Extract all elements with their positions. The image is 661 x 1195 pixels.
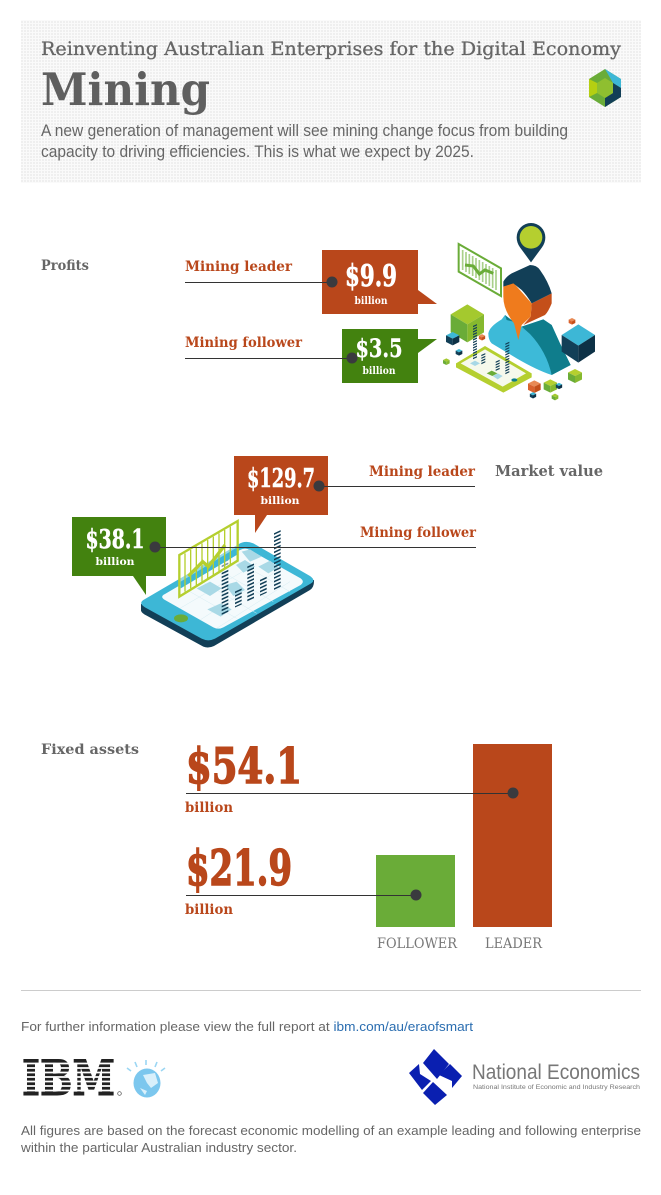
callout: leader market value $129.7 billion: billion [260,496,300,507]
callout: follower profit $3.5 billion [342,329,437,383]
icon: hexagonal gem [589,69,621,107]
disclaimer: within the particular Australian industry sector. [20,1140,297,1155]
logo: National Economics [409,1049,640,1105]
disclaimer: All figures are based on the forecast economic modelling of an example leading and following enterprise [21,1123,641,1138]
follower line [150,542,476,552]
logo: National Economics: National Economics [472,1061,640,1084]
leader line [185,276,338,288]
callout: follower profit $3.5 billion: $3.5 [356,334,402,363]
intro text: capacity to driving efficiencies. This is what we expect by 2025. [41,143,474,161]
bar chart: fixed assets [376,744,552,952]
callout: leader profit $9.9 billion [322,250,437,314]
axis labels: FOLLOWER [377,936,458,952]
value: $54.1 billion [185,737,518,816]
callout: leader profit $9.9 billion: billion [354,296,388,307]
cube: dark blue [562,324,595,363]
panel: header [21,20,641,183]
bar stacks [225,532,277,613]
floating chart [459,244,501,296]
axis labels: LEADER [485,936,543,952]
section label: fixed assets: Fixed assets [41,742,139,758]
value: $21.9 billion: billion [185,902,233,918]
section label: profits: Profits [41,258,89,274]
tablet body [141,542,314,648]
illustration: person with cubes and tablet [443,223,595,400]
profits: mining leader label: Mining leader [185,259,293,275]
market value: mining leader label: Mining leader [369,464,476,480]
icon: smarter planet globe [127,1060,165,1098]
value: $54.1 billion: $54.1 [186,737,302,795]
icon: location pin [517,223,545,262]
value: $54.1 billion: billion [185,800,233,816]
follower line [185,352,358,364]
callout: leader profit $9.9 billion: $9.9 [345,259,397,294]
floating chart [179,521,238,597]
further information text: For further information please view the full report at ibm.com/au/eraofsmart [21,1019,473,1034]
person head [503,265,552,340]
bar: follower [376,855,455,927]
axis labels [377,936,543,952]
callout: leader market value $129.7 billion [234,456,328,533]
screen tiles [197,549,278,617]
value: $21.9 billion [185,839,422,918]
cube: green [451,304,484,342]
callout: follower market value $38.1 billion [72,517,166,595]
logo: National Economics: National Institute of Economic and Industry Research [473,1084,640,1091]
small cubes [443,318,582,400]
leader line [314,480,475,492]
logo: IBM: IBM [22,1049,115,1107]
market value: mining follower label: Mining follower [360,525,477,541]
intro text [41,122,568,161]
callout: follower market value $38.1 billion: $38.1 [86,525,144,555]
value: $21.9 billion: $21.9 [186,839,292,897]
header subtitle: Reinventing Australian Enterprises for the Digital Economy [41,38,621,60]
intro text: A new generation of management will see mining change focus from building [41,122,568,140]
section label: market value: Market value [495,462,603,480]
title: Mining [41,63,210,116]
person body [488,315,571,375]
callout: leader market value $129.7 billion: $129.7 [247,464,315,494]
callout: follower profit $3.5 billion: billion [362,366,396,377]
tablet [456,325,532,393]
disclaimer [20,1123,641,1155]
callout: follower market value $38.1 billion: billion [96,557,135,568]
bar: leader [473,744,552,927]
illustration: tablet with chart [141,521,314,648]
profits: mining follower label: Mining follower [185,335,303,351]
